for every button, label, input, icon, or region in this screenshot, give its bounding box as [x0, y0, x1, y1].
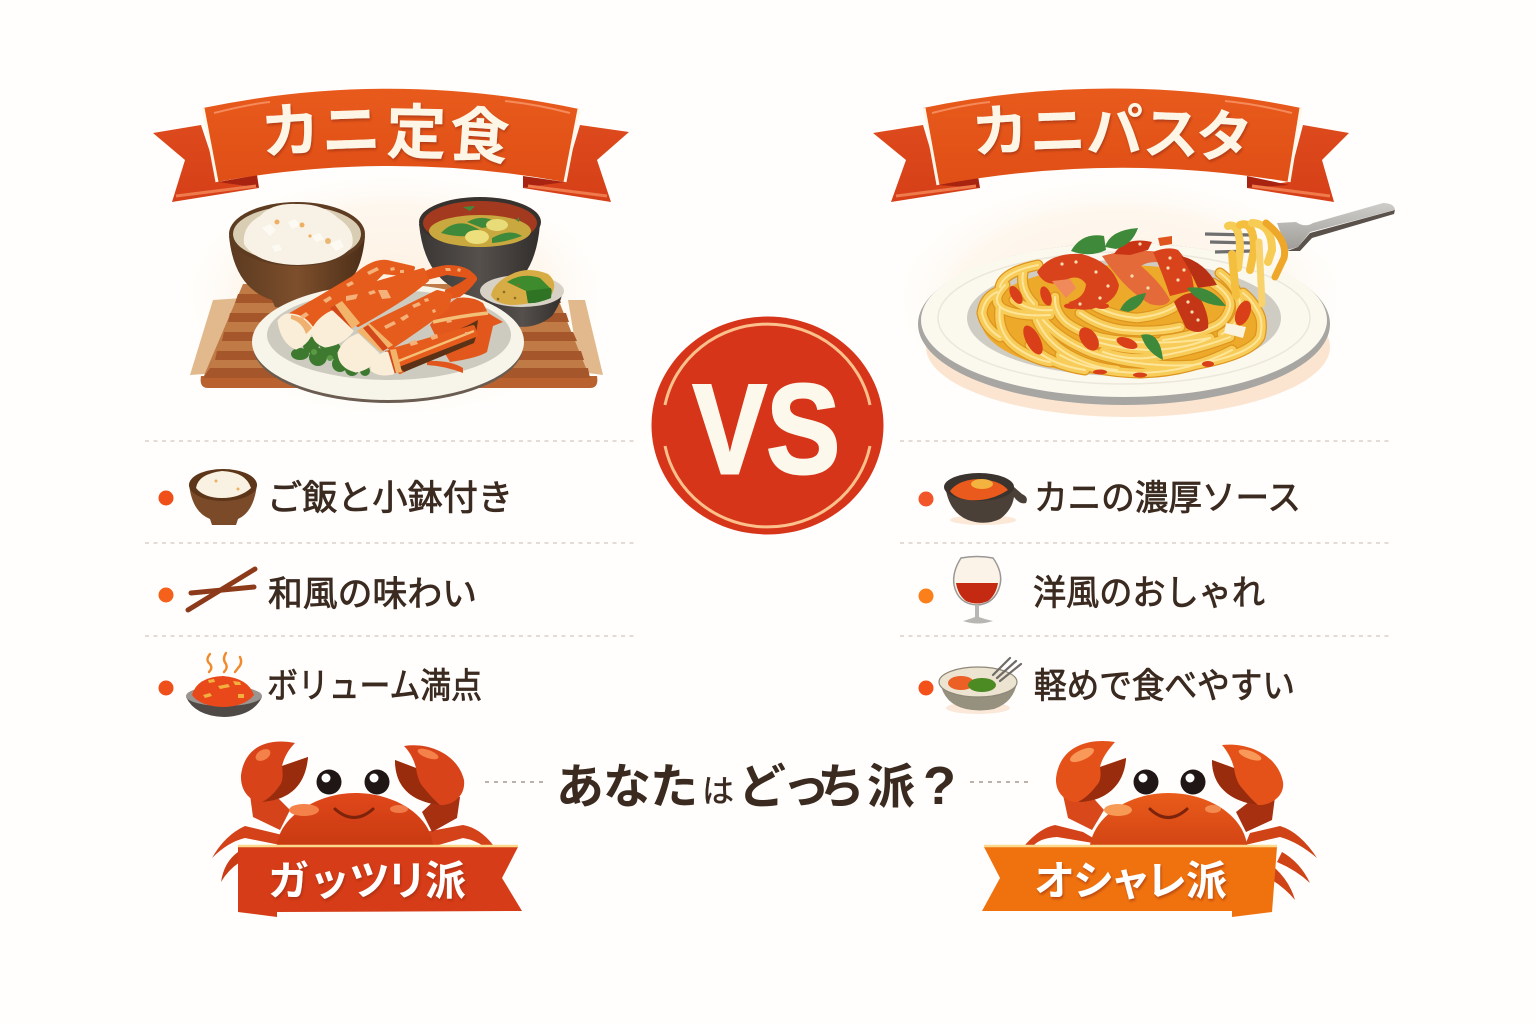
item: western chic: 洋風のおしゃれ	[1033, 574, 1265, 613]
item: rice and side dishes	[158, 469, 513, 525]
icon: chopsticks	[188, 569, 255, 610]
ribbon label: オシャレ派	[1034, 858, 1227, 904]
crab body	[1025, 770, 1317, 900]
back legs	[430, 298, 503, 362]
miso soup bowl	[419, 197, 541, 300]
side dish	[480, 270, 564, 327]
leg D	[393, 327, 476, 372]
shell speckles	[300, 267, 468, 346]
banner: kani teishoku	[153, 89, 629, 202]
vs text: VS	[693, 358, 840, 500]
item: rich crab sauce: カニの濃厚ソース	[1034, 479, 1301, 518]
question: which are you: どっち派	[738, 761, 915, 814]
item: light and easy: 軽めで食べやすい	[1034, 667, 1295, 706]
ribbon label: ガッツリ派	[268, 858, 466, 904]
leg C	[370, 292, 450, 348]
divider	[145, 441, 636, 636]
icon: rice bowl	[189, 469, 257, 525]
item: japanese flavor: 和風の味わい	[268, 575, 477, 614]
panel: kani pasta	[873, 88, 1395, 714]
item: western chic	[918, 556, 1265, 624]
icon: bowl with fork	[939, 658, 1021, 714]
leg B	[342, 270, 427, 325]
glow behind meal	[170, 165, 620, 425]
icon: steaming dish	[186, 653, 262, 717]
item: rich crab sauce	[918, 473, 1301, 525]
banner: kani pasta	[873, 88, 1349, 202]
basil leaves	[1071, 228, 1226, 360]
crab mascot: stylish type	[982, 741, 1317, 917]
banner title text: カニパスタ	[969, 98, 1254, 172]
plate shadow	[926, 277, 1330, 417]
claws	[241, 742, 464, 805]
illustration: crab pasta	[918, 203, 1395, 417]
question: which are you: あなた	[556, 761, 698, 814]
spaghetti nest	[981, 265, 1263, 378]
plate	[252, 284, 524, 403]
rice bowl	[229, 202, 365, 310]
question: which are you: ?	[923, 756, 956, 816]
crab mascot: hearty type	[212, 742, 522, 917]
glow behind pasta	[880, 170, 1360, 430]
item: light and easy	[918, 658, 1295, 714]
question: which are you	[485, 756, 1032, 816]
feature list: kani pasta	[918, 473, 1301, 714]
banner title text: カニ定食	[258, 96, 512, 172]
crab legs	[279, 262, 503, 374]
icon: wine glass	[954, 556, 1001, 624]
item: japanese flavor	[158, 569, 477, 614]
divider	[900, 441, 1389, 636]
parsley garnish	[291, 337, 370, 376]
item: big portion	[158, 653, 482, 717]
crab body	[212, 770, 493, 882]
vs badge	[652, 316, 884, 534]
item: rice and side dishes: ご飯と小鉢付き	[267, 479, 513, 518]
question: which are you: は	[702, 773, 734, 809]
illustration: crab set meal	[190, 197, 603, 403]
fork with twirled noodles	[1205, 203, 1395, 304]
panel: kani teishoku	[145, 89, 636, 717]
item: big portion: ボリューム満点	[267, 667, 482, 706]
feature list: kani teishoku	[158, 469, 513, 717]
ribbon label	[238, 846, 522, 917]
leg B claw	[423, 265, 477, 300]
crab and shrimp topping	[1037, 236, 1217, 332]
ribbon label	[982, 846, 1277, 917]
leg A	[290, 262, 413, 325]
claws	[1056, 741, 1283, 805]
placemat	[190, 284, 603, 388]
icon: sauce pan	[944, 473, 1027, 525]
plate	[918, 243, 1330, 405]
